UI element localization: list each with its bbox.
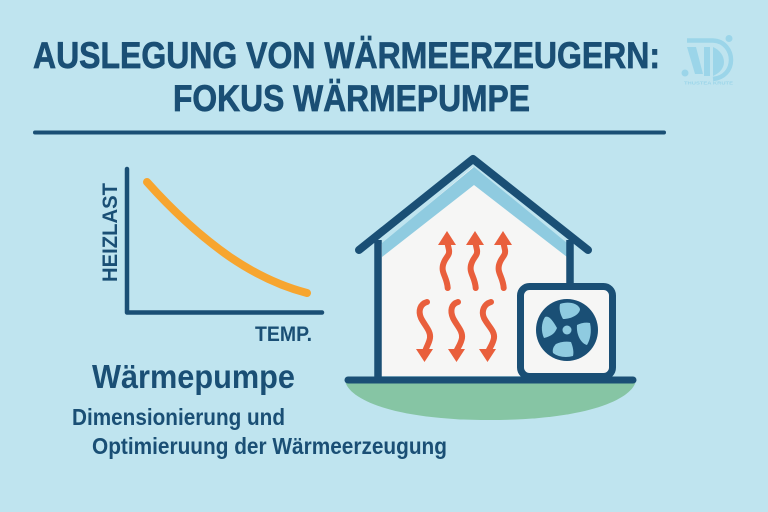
description text: [72, 404, 447, 459]
house wall: [378, 167, 570, 376]
title: AUSLEGUNG VON WÄRMEERZEUGERN:: [33, 35, 660, 76]
description text: Dimensionierung und: [72, 404, 285, 430]
x axis label: TEMP.: [255, 323, 312, 346]
outdoor unit: [520, 286, 612, 376]
heating load curve: [147, 182, 307, 293]
falling cool arrows: [416, 302, 496, 362]
title: [33, 35, 660, 119]
logo: THUSTEA KRUTE: [684, 80, 733, 86]
roof: [359, 159, 588, 250]
title divider: [35, 130, 664, 134]
illustration: house with heat pump: [345, 159, 636, 420]
chart: heating load over temperature: [99, 169, 322, 346]
subtitle heading: Wärmepumpe: [92, 358, 295, 395]
rising heat arrows: [438, 231, 512, 288]
roof underside band: [382, 167, 567, 257]
ground line: [348, 376, 633, 384]
ground: [345, 380, 636, 420]
title: FOKUS WÄRMEPUMPE: [173, 78, 530, 119]
fan: [536, 299, 598, 361]
y axis label: HEIZLAST: [99, 183, 122, 282]
description text: Optimieruung der Wärmeerzeugung: [92, 433, 447, 459]
logo: [682, 35, 733, 86]
walls: [378, 240, 570, 378]
chart axes: [127, 169, 322, 312]
